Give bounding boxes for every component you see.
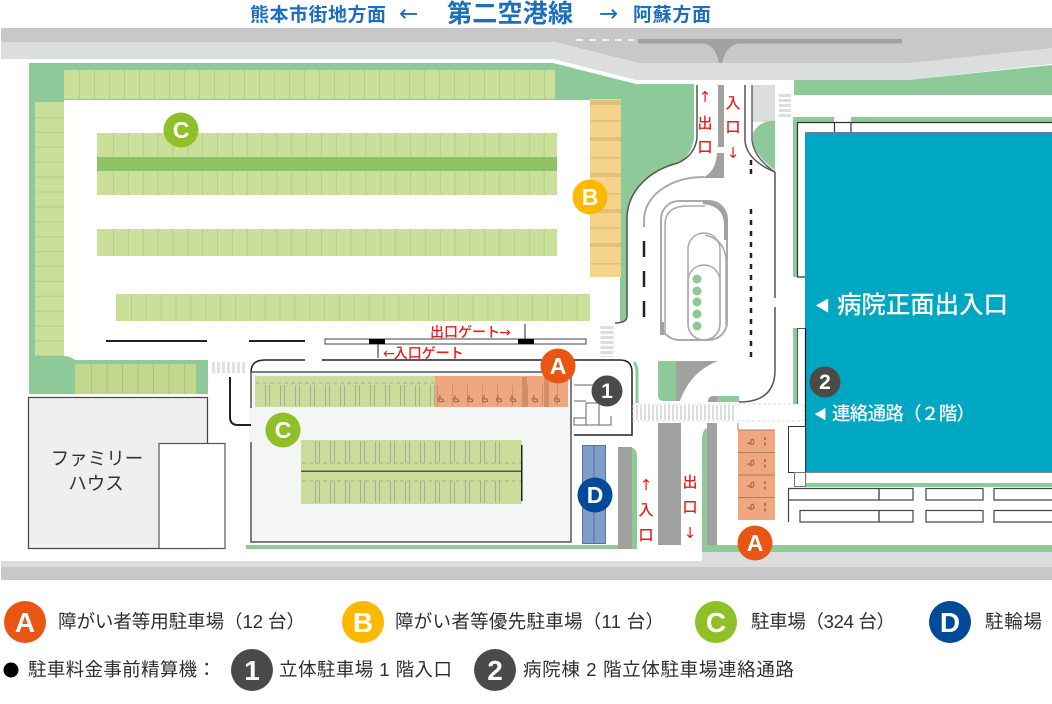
gate bar [325,324,586,358]
route heading: 第二空港線 [447,0,573,28]
map badge D [578,478,612,512]
road direction labels: lower: ↑ [640,476,652,494]
map badge D: D [587,482,603,508]
green landscaping around main lot [29,63,694,394]
parking stalls C: left column [35,102,64,356]
green area top right [794,65,1052,95]
green strip under structure [246,545,618,549]
map badge C upper [164,112,198,148]
road direction labels: lower: 口 [682,499,698,516]
bicycle parking D [582,445,606,544]
map badge 1 [592,376,622,406]
map badge A lower: A [747,530,763,556]
map badge C lower [266,412,300,448]
legend 1: 1 [244,655,260,686]
map badge A lower [738,526,772,560]
top road [1,28,1052,80]
legend 1: 立体駐車場 1 階入口 [279,659,452,680]
bottom road [1,552,1052,580]
map badge 2: 2 [819,371,831,394]
legend D: 駐輪場 [985,611,1042,632]
road direction labels: upper: 出 [697,115,713,132]
medians and islands [618,361,739,552]
parking stalls C: fourth row [116,294,590,321]
hospital entrance label: 病院正面出入口 [837,291,1008,319]
road direction labels: upper: 口 [725,119,741,136]
roundabout island [661,201,727,340]
family house [28,398,225,548]
green strip lower right [703,545,1052,552]
legend B [342,601,664,643]
structure stalls: upper green [255,376,435,407]
structure stalls: inner rows [301,440,522,504]
map badge A structure: A [550,353,566,379]
road direction labels: upper: 口 [697,139,713,156]
road direction labels: upper: ↑ [699,88,711,106]
machine booth [574,385,611,425]
family house: ファミリー [51,448,143,469]
crosswalk by gate [600,326,614,357]
legend: payment machines: 駐車料金事前精算機： [28,659,216,680]
gate label: exit: 出口ゲート→ [430,324,511,341]
legend B: B [353,607,373,638]
legend 2 [474,649,794,691]
road direction labels: lower [638,474,698,544]
legend C: C [706,607,726,638]
map badge C upper: C [173,117,189,143]
hospital entrance label: ◀ [815,298,830,315]
hospital road network [615,85,775,402]
road direction labels: lower: ↓ [684,524,696,542]
link corridor label: 連絡通路（２階） [832,403,975,424]
legend A: 障がい者等用駐車場（12 台） [58,611,305,632]
map badge B [572,180,608,214]
map badge B: B [582,184,598,210]
connecting bridge crosswalk [633,404,803,421]
hospital building [788,117,1052,487]
route heading: 阿蘇方面 [633,3,711,26]
road direction labels: lower: 口 [638,527,654,544]
link corridor label: ◀ [814,407,827,422]
crosswalk top right [779,94,791,119]
road direction labels: lower: 出 [682,474,698,491]
accessible stalls A lower [738,423,775,520]
parking structure [230,360,637,542]
legend 1 [231,649,452,691]
wheelchair marks [747,437,765,513]
map badge A structure [540,348,576,384]
legend B: 障がい者等優先駐車場（11 台） [395,611,664,632]
map badge 2 [810,366,840,398]
route heading [250,0,711,28]
map badge C lower: C [275,417,291,443]
legend D: D [940,607,960,638]
legend C [695,601,895,643]
road direction labels: lower: 入 [638,502,654,519]
parking stalls C: top row [64,70,555,99]
parking stalls C: third row [97,229,557,256]
route heading: 熊本市街地方面 [250,3,386,26]
route heading: → [599,1,618,27]
parking stalls B [590,99,621,277]
parking stalls C: lower left row [75,364,196,394]
gate label: entrance: ←入口ゲート [383,345,464,362]
crosswalk left [212,362,247,373]
wheelchair marks [438,395,560,402]
road direction labels: upper: 入 [725,95,741,112]
legend 2: 2 [487,655,503,686]
parking stalls C: double row [97,133,557,195]
legend A: A [15,607,35,638]
hospital parking outlines [788,488,1052,522]
legend 2: 病院棟 2 階立体駐車場連絡通路 [523,659,794,680]
route heading: ← [399,1,418,27]
road direction labels: upper [697,88,741,162]
structure stalls: accessible orange [435,376,568,407]
legend A [4,601,305,643]
legend D [929,601,1042,643]
white main lot surface [64,100,620,360]
map badge 1: 1 [601,380,613,403]
annex boxes [788,426,806,472]
road direction labels: upper: ↓ [727,144,739,162]
legend C: 駐車場（324 台） [751,611,895,632]
family house: ハウス [68,473,124,494]
barriers [106,340,305,342]
